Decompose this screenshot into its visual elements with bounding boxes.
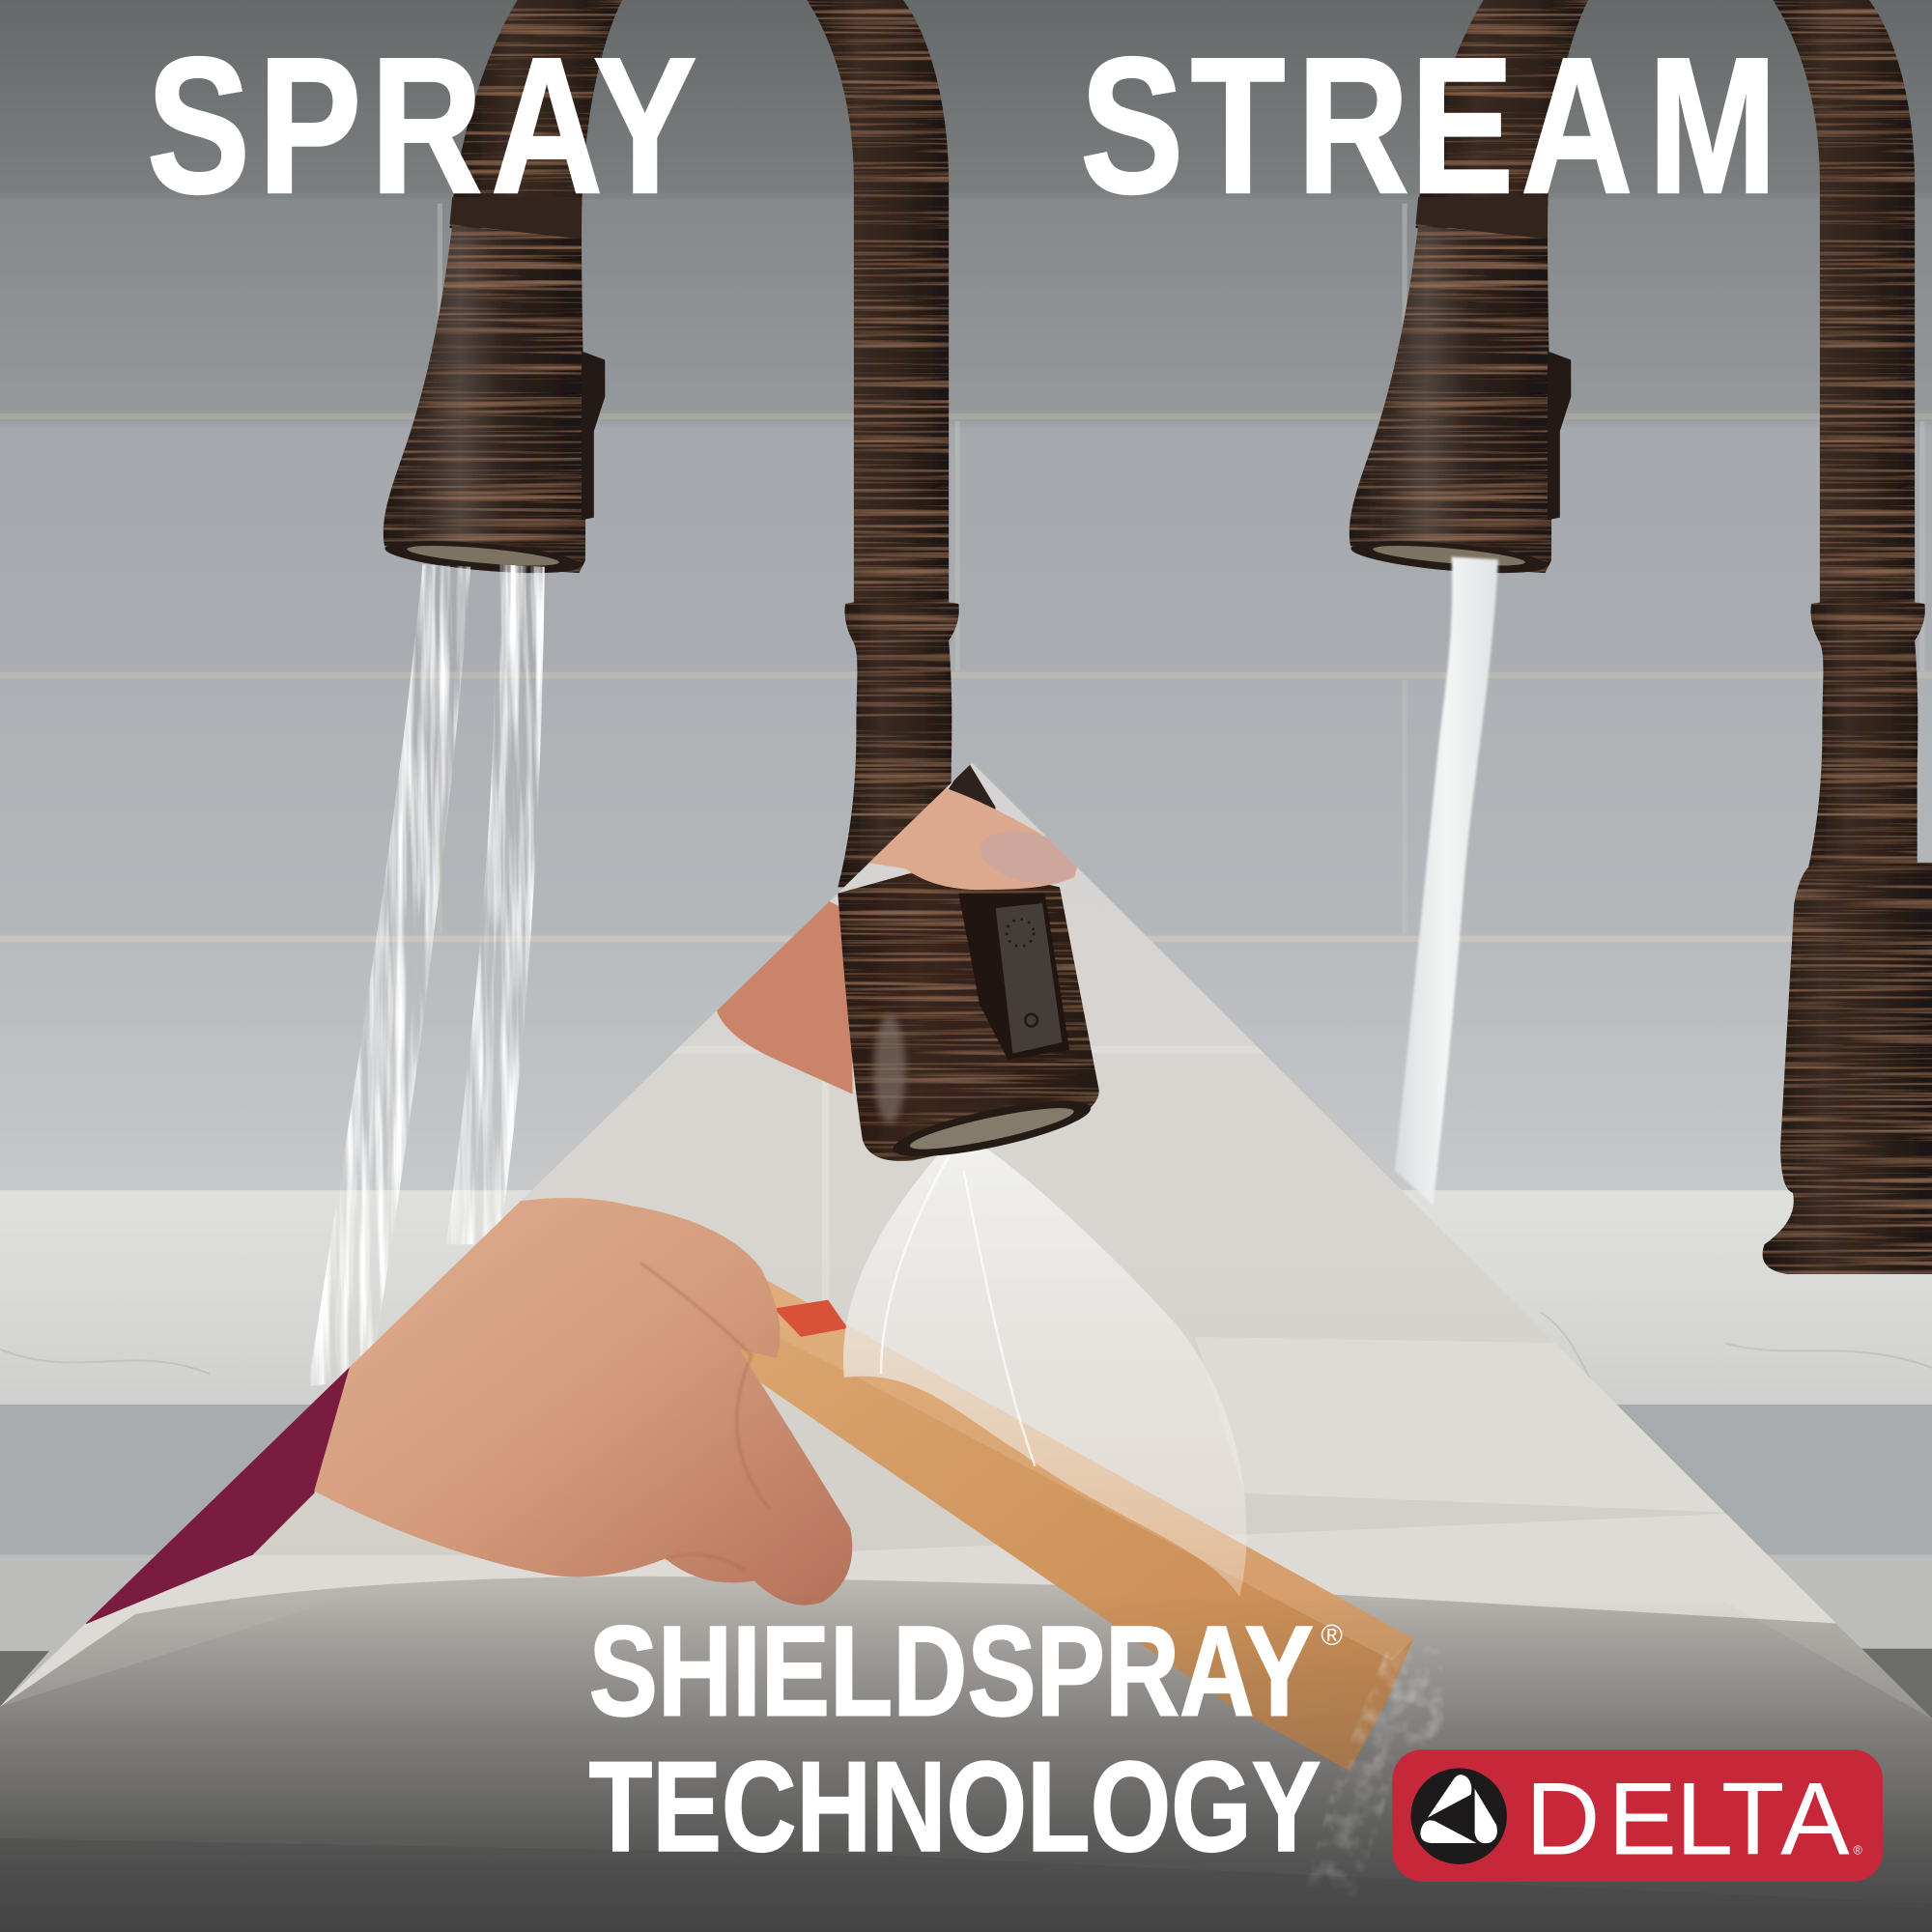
button dots <box>1007 920 1034 947</box>
countertop <box>0 1190 1932 1405</box>
right faucet <box>1350 0 1932 1274</box>
finger <box>867 784 1083 893</box>
triangle background <box>0 763 1907 1706</box>
triangle tile details <box>673 1053 829 1300</box>
lower dark wedge: left <box>0 1651 49 1707</box>
panel: shieldspray triangle <box>0 760 1932 1932</box>
sprayer face <box>893 1101 1092 1156</box>
left faucet <box>384 0 959 887</box>
button ring <box>1025 1014 1037 1026</box>
hand <box>314 1198 852 1605</box>
heading: shieldspray technology: SHIELDSPRAY <box>589 1601 1314 1744</box>
stream water <box>1395 557 1498 1205</box>
heading: shieldspray technology: ® <box>1321 1619 1343 1652</box>
logo mark <box>1410 1768 1507 1864</box>
button <box>996 903 1062 1054</box>
head highlight <box>873 1015 906 1123</box>
bottom dark gradient <box>0 1589 1932 1932</box>
fingernail <box>980 831 1077 884</box>
heading: shieldspray technology: TECHNOLOGY <box>589 1736 1321 1879</box>
right faucet base <box>1763 863 1932 1274</box>
logo registered mark: ® <box>1853 1843 1862 1858</box>
finger creases <box>640 1263 770 1571</box>
heading: stream: STREAM <box>1080 18 1777 234</box>
back fingers <box>715 899 853 1094</box>
wood brush <box>721 1275 1413 1771</box>
water bubble <box>843 1140 1246 1597</box>
spray head neck tip <box>949 765 996 810</box>
logo: delta <box>1392 1749 1883 1882</box>
spray head <box>838 863 1099 1168</box>
sink basin <box>0 1577 1932 1932</box>
spray water left stream <box>308 564 545 1386</box>
bottom floor band <box>0 1838 1932 1932</box>
background: tiled wall <box>0 0 1932 1193</box>
logo wordmark: DELTA <box>1525 1761 1850 1877</box>
splash water <box>1306 1645 1444 1897</box>
lower dark wedge: right <box>1861 1649 1932 1719</box>
lower counter band <box>0 1555 1932 1932</box>
heading: shieldspray technology <box>589 1601 1343 1879</box>
tile grout lines <box>0 201 1932 939</box>
red residue on brush <box>774 1300 848 1337</box>
button recess <box>958 894 1069 1060</box>
triangle lower counter <box>0 1337 1932 1719</box>
heading: spray: SPRAY <box>147 18 696 234</box>
cabinet below counter <box>0 1405 1932 1559</box>
sleeve <box>85 1364 354 1625</box>
marble veins <box>0 1312 1932 1403</box>
spray water right stream <box>446 564 545 1244</box>
